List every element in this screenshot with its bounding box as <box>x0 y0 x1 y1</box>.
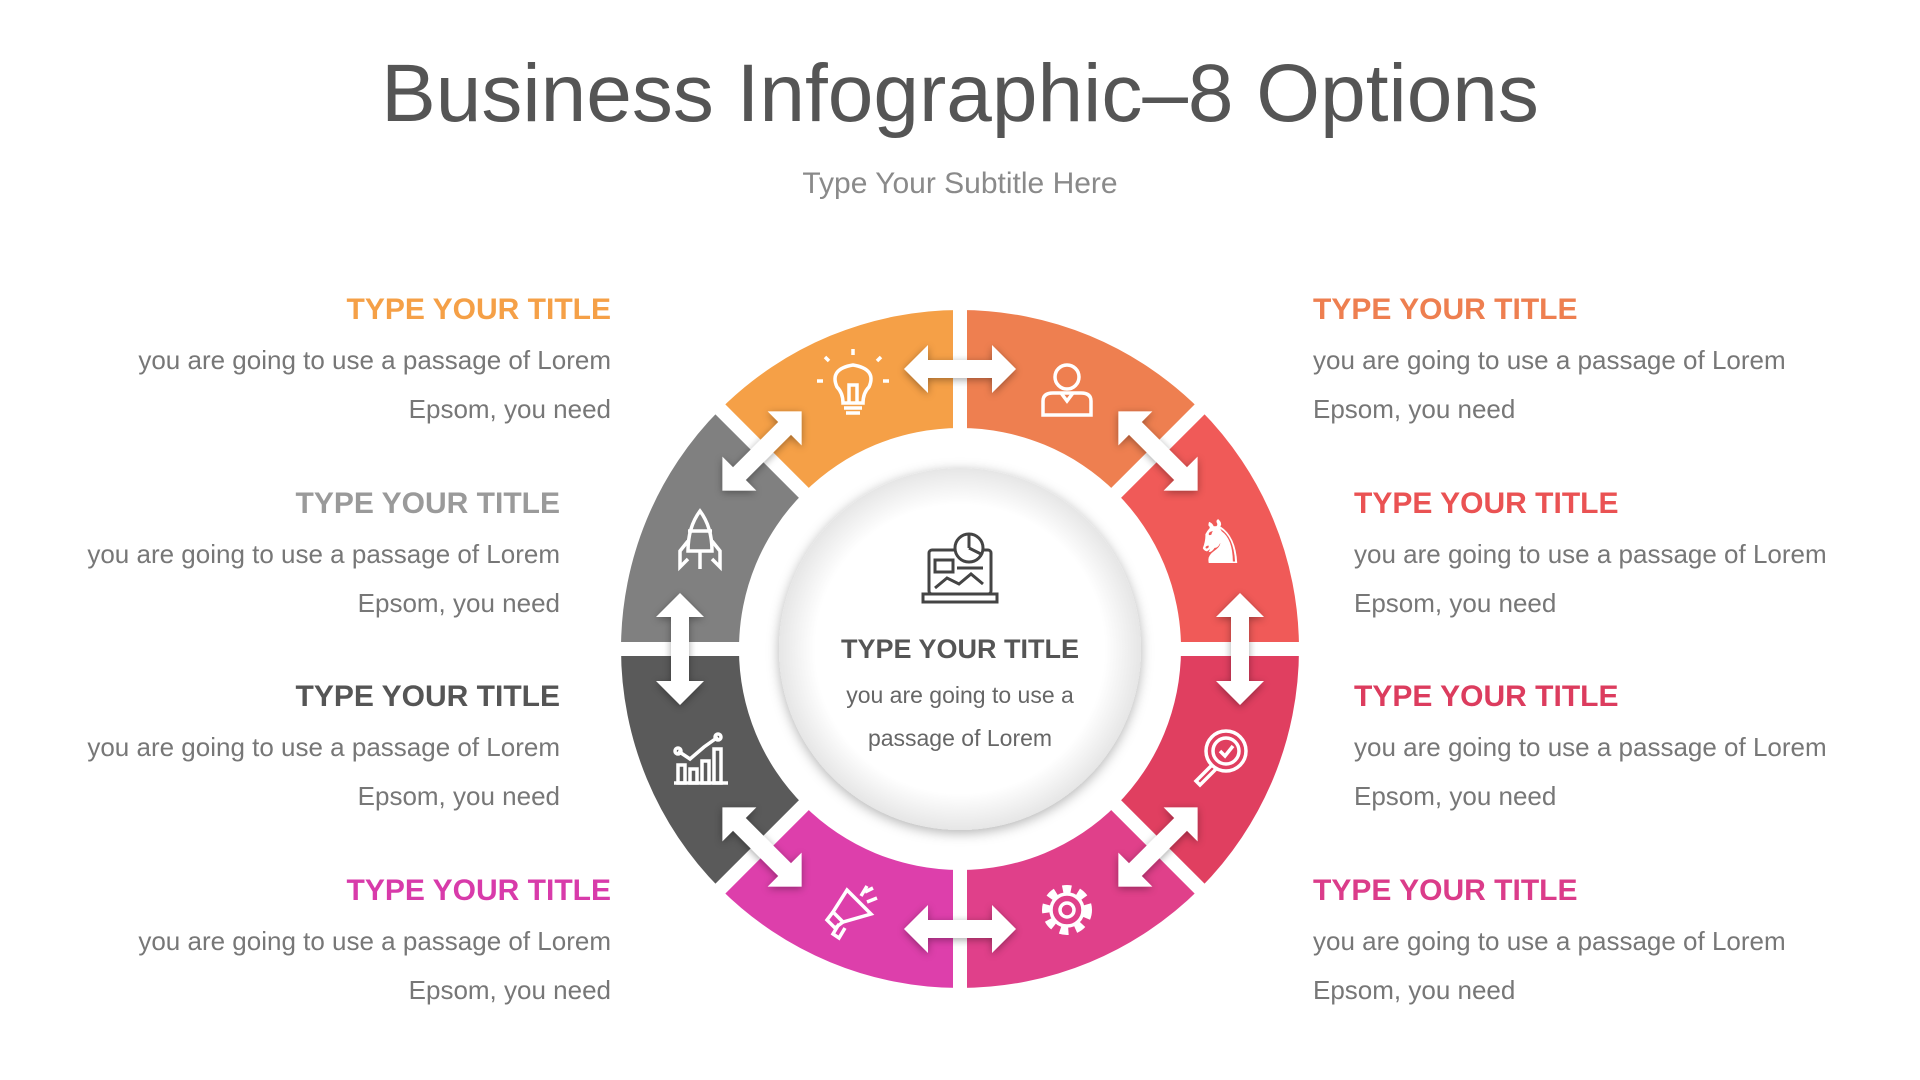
text block: right 2: you are going to use a passage of Lorem <box>1354 539 1827 569</box>
title: Business Infographic–8 Options <box>381 48 1539 139</box>
icon: magnifier check <box>1196 731 1246 785</box>
text block: right 1: Epsom, you need <box>1313 394 1515 424</box>
icon: center laptop dashboard <box>923 534 997 602</box>
icon: person <box>1043 365 1091 415</box>
subtitle: Type Your Subtitle Here <box>802 167 1118 200</box>
text block: left 2: TYPE YOUR TITLE <box>296 487 560 520</box>
center title: TYPE YOUR TITLE <box>841 634 1079 664</box>
arrows <box>656 345 1264 953</box>
icon: rocket <box>680 511 720 569</box>
text block: left 1 <box>138 293 611 424</box>
text block: right 2: Epsom, you need <box>1354 588 1556 618</box>
text block: left 4 <box>138 874 611 1005</box>
text block: right 3: TYPE YOUR TITLE <box>1354 680 1618 713</box>
text block: right 4: TYPE YOUR TITLE <box>1313 874 1577 907</box>
icon: megaphone <box>827 886 877 938</box>
text block: right 2: TYPE YOUR TITLE <box>1354 487 1618 520</box>
text block: right 1 <box>1313 293 1786 424</box>
text block: right 1: TYPE YOUR TITLE <box>1313 293 1577 326</box>
text block: left 3: Epsom, you need <box>358 781 560 811</box>
center body: you are going to use a <box>846 682 1074 708</box>
text block: left 2: Epsom, you need <box>358 588 560 618</box>
text block: left 4: TYPE YOUR TITLE <box>347 874 611 907</box>
icon: bulb <box>817 349 889 413</box>
icon: gear <box>1047 890 1087 930</box>
text block: right 4: Epsom, you need <box>1313 975 1515 1005</box>
text block: left 1: TYPE YOUR TITLE <box>347 293 611 326</box>
icon: chess knight: ♞ <box>1193 508 1247 578</box>
text block: right 3 <box>1354 680 1827 811</box>
text block: right 3: Epsom, you need <box>1354 781 1556 811</box>
text block: left 2: you are going to use a passage of Lorem <box>87 539 560 569</box>
text block: left 3: you are going to use a passage of Lorem <box>87 732 560 762</box>
text block: left 2 <box>87 487 560 618</box>
text block: left 1: you are going to use a passage of Lorem <box>138 345 611 375</box>
text block: left 3: TYPE YOUR TITLE <box>296 680 560 713</box>
center body <box>846 682 1074 751</box>
text block: left 3 <box>87 680 560 811</box>
text block: right 2 <box>1354 487 1827 618</box>
text block: right 4 <box>1313 874 1786 1005</box>
segments <box>551 240 1369 1058</box>
center circle <box>779 468 1141 830</box>
text block: right 1: you are going to use a passage of Lorem <box>1313 345 1786 375</box>
text block: right 4: you are going to use a passage of Lorem <box>1313 926 1786 956</box>
center body: passage of Lorem <box>868 725 1052 751</box>
text block: right 3: you are going to use a passage of Lorem <box>1354 732 1827 762</box>
icon: chart <box>674 734 728 783</box>
text block: left 4: you are going to use a passage of Lorem <box>138 926 611 956</box>
text block: left 4: Epsom, you need <box>409 975 611 1005</box>
text block: left 1: Epsom, you need <box>409 394 611 424</box>
